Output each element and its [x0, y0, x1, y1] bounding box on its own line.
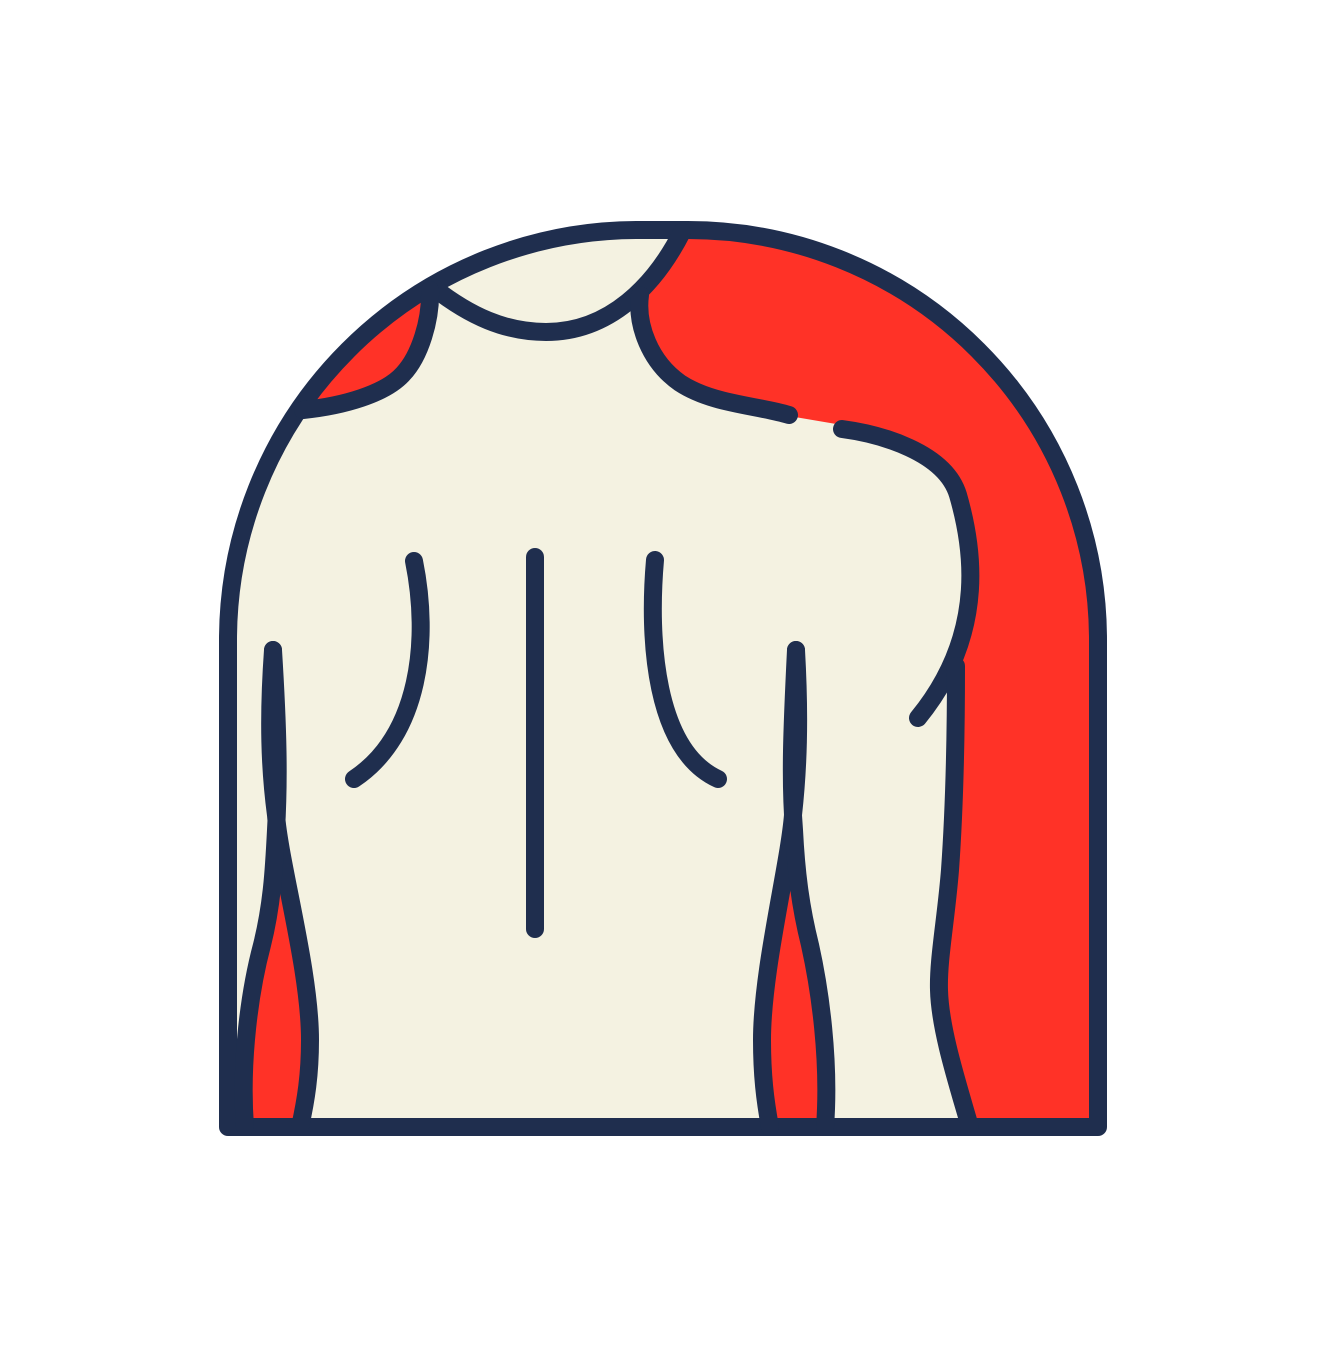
arch background — [228, 230, 1098, 1127]
left shoulder blade — [354, 561, 421, 779]
right neck to shoulder line — [639, 295, 789, 415]
arch outline — [228, 230, 1098, 1127]
red pain area: left side — [244, 815, 310, 1127]
spine — [526, 557, 544, 929]
red pain area: right side — [762, 815, 826, 1127]
red pain area: left shoulder — [303, 290, 430, 410]
neckline — [434, 232, 682, 332]
right torso lines — [762, 650, 826, 1127]
left torso lines — [244, 650, 310, 1127]
right shoulder blade — [653, 560, 718, 779]
red pain area: right shoulder and arm — [639, 230, 1098, 1127]
right shoulder contour — [842, 429, 970, 718]
left shoulder line — [303, 290, 430, 410]
right arm edge — [939, 666, 970, 1127]
